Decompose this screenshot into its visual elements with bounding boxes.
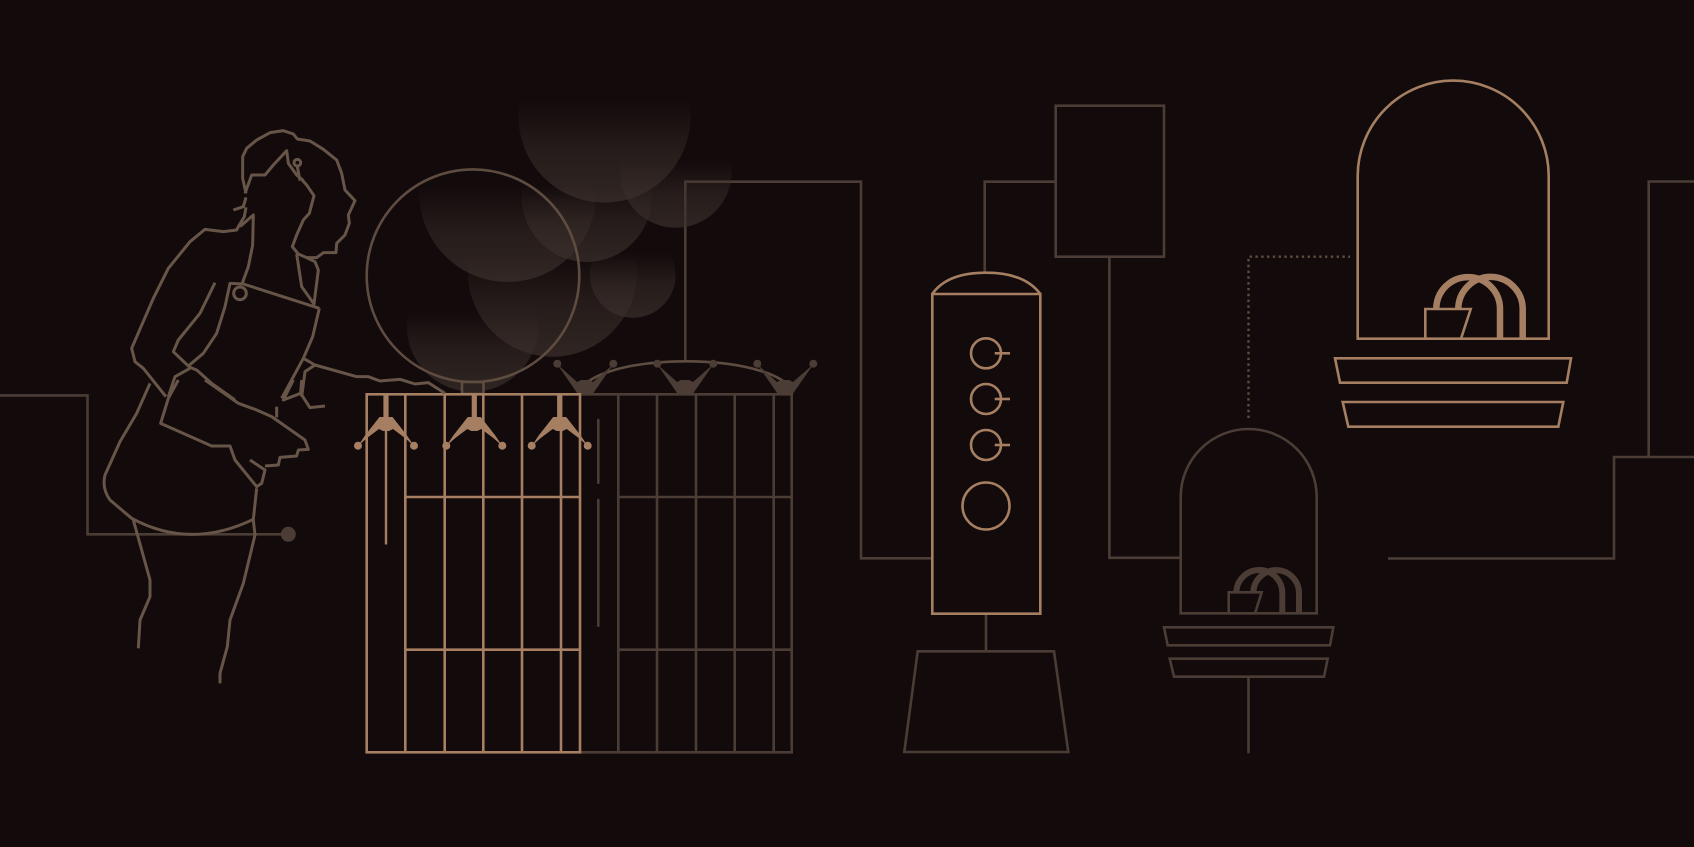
small arched window [1164, 429, 1333, 677]
large gauge [962, 482, 1010, 530]
gauge 1 [971, 338, 1010, 368]
figure: upper body [132, 131, 445, 400]
large flask circle [367, 169, 579, 394]
lower tray [1170, 659, 1328, 677]
connector pipes [0, 182, 1694, 753]
copper rack grid [367, 394, 580, 752]
figure: lower body [104, 380, 325, 683]
dim fork valves [553, 360, 817, 394]
pot [1229, 592, 1262, 613]
pot [1425, 309, 1471, 339]
gauge 3 [971, 430, 1010, 460]
gauge 2 [971, 384, 1010, 414]
column base [904, 651, 1068, 752]
distillation column [932, 273, 1040, 614]
arches [1436, 277, 1523, 339]
pipe end dot [281, 527, 296, 542]
smoke clouds [407, 31, 732, 392]
upper tray [1335, 358, 1571, 383]
upper tray [1164, 627, 1333, 645]
dim rack grid [580, 394, 792, 752]
arches [1236, 570, 1299, 613]
dim rack arch [580, 361, 792, 394]
top square tank [1056, 106, 1164, 257]
dotted connector [1248, 257, 1350, 418]
large arched window [1335, 81, 1571, 427]
lower tray [1343, 402, 1563, 427]
copper fork valves [354, 394, 592, 544]
